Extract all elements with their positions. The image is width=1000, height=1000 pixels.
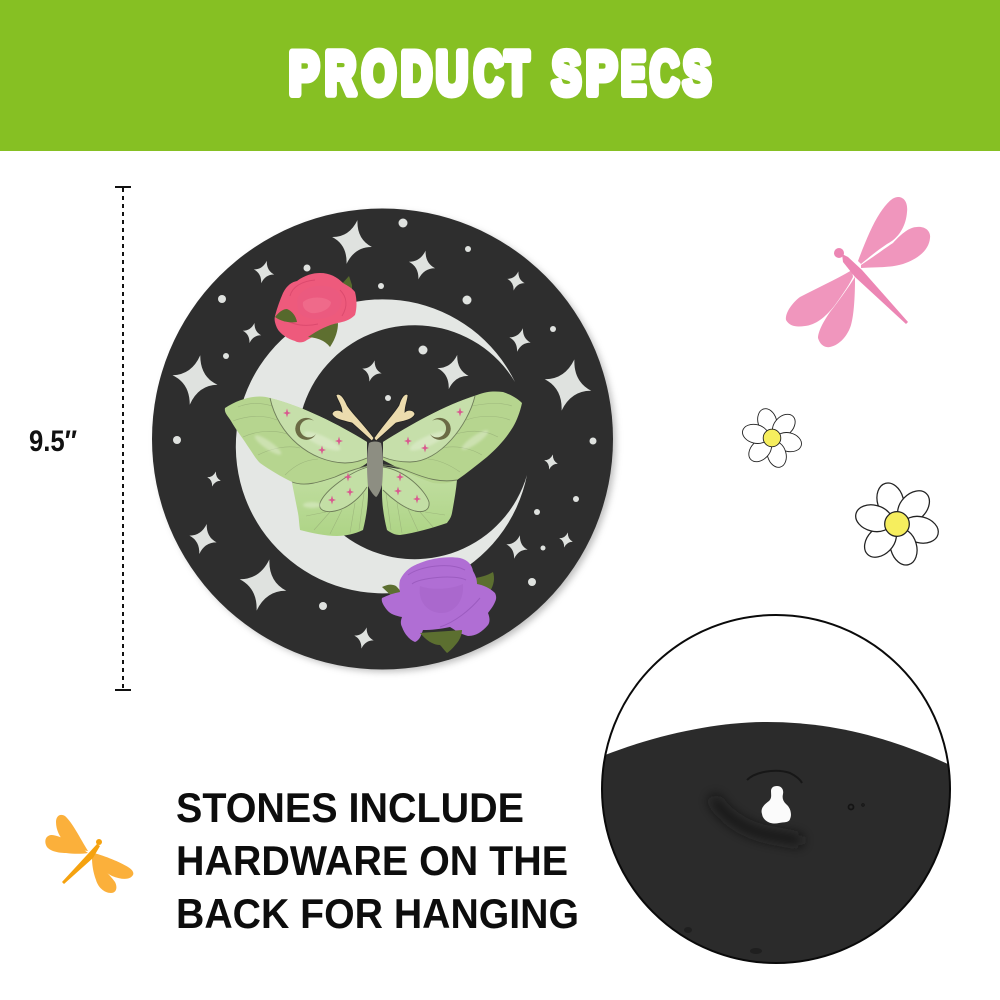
title: P: [586, 40, 617, 107]
red rose: [275, 273, 356, 347]
title: S: [552, 40, 581, 107]
purple rose: [382, 557, 496, 653]
icon: pink dragonfly: [786, 197, 930, 347]
embossed arc: [747, 771, 802, 783]
title: T: [505, 40, 529, 107]
hanging hardware text: STONES INCLUDE: [176, 784, 524, 831]
icon: large daisy: [853, 480, 941, 568]
hanging hardware text: HARDWARE ON THE: [176, 837, 568, 884]
title: C: [474, 40, 503, 107]
depression shading: [713, 797, 802, 841]
wing panels: [270, 398, 367, 463]
stone back surface: [603, 722, 949, 962]
stepping stone: [152, 208, 616, 672]
wing highlights: [253, 428, 490, 508]
crescent moon: [236, 299, 527, 593]
title: E: [621, 40, 646, 107]
moth: [225, 391, 522, 536]
left forewing: [225, 396, 367, 484]
icon: small daisy: [740, 406, 804, 470]
pink wing stars: [283, 408, 464, 504]
body: [367, 442, 383, 497]
antennae: [332, 394, 374, 441]
wing lines: [270, 396, 475, 512]
right forewing: [383, 391, 522, 484]
wing veins: [233, 403, 512, 534]
title: P: [289, 40, 319, 107]
title: S: [683, 40, 711, 107]
title: D: [401, 40, 432, 107]
surface marks: [848, 804, 864, 810]
icon: orange dragonfly: [45, 815, 133, 893]
keyhole hanger: [762, 786, 791, 824]
hanging hardware text: BACK FOR HANGING: [176, 890, 579, 937]
right hind wing: [382, 466, 457, 535]
title: R: [325, 40, 356, 107]
wing moons: [295, 418, 316, 440]
title: U: [436, 40, 468, 107]
inset border: [602, 615, 950, 963]
stars: [167, 215, 598, 651]
back of stone inset: [590, 615, 960, 980]
stone disc: [152, 208, 613, 670]
left hind wing: [292, 466, 368, 536]
dimension label: 9.5″: [29, 425, 77, 458]
title: C: [650, 40, 679, 107]
header banner: [0, 0, 1000, 151]
stone shadow: [156, 212, 616, 672]
title: O: [362, 40, 396, 107]
dimension line: [115, 187, 131, 690]
